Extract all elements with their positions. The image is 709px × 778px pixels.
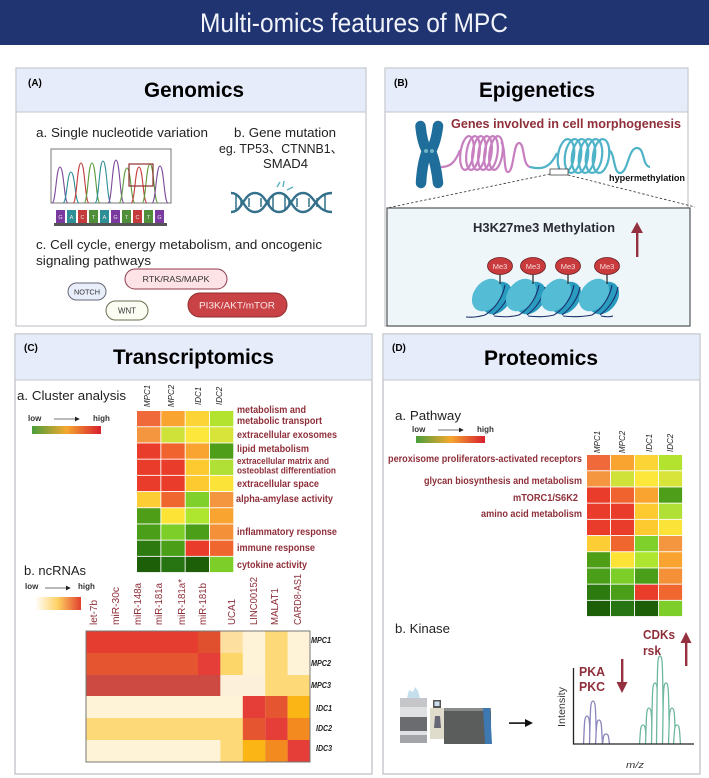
heatmap row labels: inflammatory response bbox=[237, 527, 337, 538]
text: gene mutation: b. Gene mutation bbox=[234, 125, 336, 140]
ncRNA column labels: miR-30c bbox=[110, 587, 122, 625]
text: cluster analysis: a. Cluster analysis bbox=[17, 388, 126, 403]
text: gene mutation: SMAD4 bbox=[263, 156, 308, 171]
text: PKA PKC bbox=[579, 664, 606, 694]
column labels: IDC2 bbox=[215, 386, 224, 405]
heatmap: cluster analysis bbox=[137, 411, 233, 572]
column labels: MPC2 bbox=[167, 384, 176, 407]
panel label A: (A) bbox=[28, 78, 42, 89]
panel: epigenetics bbox=[385, 68, 695, 326]
ncRNA row labels: IDC2 bbox=[316, 724, 332, 733]
genomics header bar bbox=[16, 68, 366, 112]
pill: RTK/RAS/MAPK: RTK/RAS/MAPK bbox=[142, 275, 210, 284]
heading: proteomics: Proteomics bbox=[484, 347, 598, 370]
coil: purple chromatin bbox=[441, 135, 530, 172]
legend: low to high: high bbox=[93, 414, 110, 423]
heatmap row labels: alpha-amylase activity bbox=[236, 494, 333, 505]
chromatogram bbox=[51, 149, 171, 226]
heatmap row labels: extracellular space bbox=[237, 479, 319, 490]
text: pathways: signaling pathways bbox=[36, 253, 151, 268]
pill: RTK/RAS/MAPK bbox=[125, 269, 227, 289]
text: gene mutation: eg. TP53、CTNNB1、 bbox=[219, 141, 343, 156]
heading: epigenetics: Epigenetics bbox=[479, 79, 595, 102]
zoom selection and dashed lines bbox=[387, 169, 695, 208]
legend: ncRNA low to high: low bbox=[25, 582, 39, 591]
legend: ncRNA low to high bbox=[25, 582, 95, 610]
heading: transcriptomics: Transcriptomics bbox=[113, 346, 274, 369]
proteomics header bar bbox=[383, 334, 700, 380]
ncRNA column labels: MALAT1 bbox=[269, 588, 281, 625]
axis label: m/z: m/z bbox=[626, 760, 644, 771]
ncRNA column labels: CARD8-AS1 bbox=[292, 574, 304, 625]
pill: WNT: WNT bbox=[118, 306, 136, 316]
arrow: up bbox=[631, 222, 643, 257]
ncRNA row labels: IDC1 bbox=[316, 704, 332, 713]
ncRNA column labels: miR-181b bbox=[197, 583, 209, 625]
chromatogram: G bbox=[157, 215, 162, 221]
column labels: MPC1 bbox=[143, 385, 152, 407]
legend: pathway low to high: high bbox=[477, 425, 494, 434]
arrow: instrument to spectrum bbox=[509, 719, 533, 727]
legend: pathway low to high bbox=[412, 425, 494, 443]
heatmap row labels: lipid metabolism bbox=[237, 444, 309, 455]
heatmap row labels: metabolic transport bbox=[237, 416, 323, 427]
pill: WNT bbox=[106, 301, 148, 320]
epigenetics header bar bbox=[385, 68, 688, 112]
nucleosomes bbox=[466, 273, 625, 320]
pathway row labels bbox=[388, 454, 582, 520]
text: CDKs rsk bbox=[643, 627, 675, 658]
coil: teal hypermethylated chromatin bbox=[530, 138, 650, 174]
panel label B: (B) bbox=[394, 78, 408, 89]
pathway column labels: IDC1 bbox=[645, 434, 654, 452]
legend: pathway low to high: low bbox=[412, 425, 426, 434]
heatmap row labels: metabolism and bbox=[237, 405, 306, 416]
text: PKA PKC: PKA bbox=[579, 664, 606, 679]
panel: proteomics bbox=[383, 334, 700, 774]
ncRNA column labels: LINC00152 bbox=[248, 577, 260, 625]
purple peaks bbox=[584, 701, 610, 744]
pathway row labels: glycan biosynthesis and metabolism bbox=[424, 476, 582, 487]
heatmap: ncRNAs bbox=[86, 631, 310, 762]
chromatogram: C bbox=[136, 215, 140, 221]
text: gene mutation bbox=[219, 125, 343, 171]
chart: mass spectrum bbox=[557, 656, 694, 771]
icon: mass spectrometer bbox=[400, 687, 492, 744]
text: PKA PKC: PKC bbox=[579, 679, 606, 694]
ncRNA row labels: IDC3 bbox=[316, 744, 332, 753]
ncRNA row labels: MPC1 bbox=[311, 636, 331, 645]
ncRNA row labels: MPC3 bbox=[311, 681, 331, 690]
chromatogram: A bbox=[70, 215, 74, 221]
heading: genomics: Genomics bbox=[144, 79, 244, 102]
heatmap row labels: immune response bbox=[237, 543, 315, 554]
panel label C: (C) bbox=[24, 343, 38, 354]
pill: NOTCH: NOTCH bbox=[74, 288, 100, 296]
text: pathways: c. Cell cycle, energy metabolism, and oncogenic bbox=[36, 237, 322, 252]
transcriptomics header bar bbox=[15, 334, 372, 380]
pill: PI3K/AKT/mTOR bbox=[188, 293, 287, 317]
pathway column labels bbox=[593, 430, 675, 453]
text: CDKs rsk: CDKs bbox=[643, 627, 675, 642]
chromatogram: G bbox=[58, 215, 63, 221]
ncRNA column labels: let-7b bbox=[88, 600, 100, 625]
pathway column labels: MPC1 bbox=[593, 431, 602, 453]
chromatogram: T bbox=[147, 215, 151, 221]
ncRNA row labels: MPC2 bbox=[311, 659, 331, 668]
box: H3K27me3 methylation bbox=[387, 208, 690, 326]
text: genes involved: Genes involved in cell morphogenesis bbox=[451, 116, 681, 131]
methyl marks bbox=[488, 258, 620, 284]
chromatogram: T bbox=[125, 215, 129, 221]
axis label: intensity: Intensity bbox=[557, 687, 568, 727]
methyl marks: Me3 bbox=[493, 262, 507, 271]
title banner: Multi-omics features of MPC bbox=[200, 8, 508, 38]
pathway row labels: mTORC1/S6K2 bbox=[513, 493, 578, 504]
heatmap: pathway bbox=[587, 455, 682, 616]
text: ncRNAs: b. ncRNAs bbox=[24, 563, 86, 578]
panel label D: (D) bbox=[392, 343, 406, 354]
ncRNA column labels: miR-148a bbox=[132, 583, 144, 625]
ncRNA column labels: miR-181a* bbox=[176, 579, 188, 625]
title banner bbox=[0, 0, 709, 45]
pathway row labels: peroxisome proliferators-activated receptors bbox=[388, 454, 582, 465]
methyl marks: Me3 bbox=[600, 262, 614, 271]
icon: DNA helix bbox=[231, 181, 332, 212]
chromatogram: G bbox=[113, 215, 118, 221]
text: hypermethylation: hypermethylation bbox=[609, 173, 685, 184]
pathway column labels: MPC2 bbox=[618, 430, 627, 453]
column labels: IDC1 bbox=[194, 387, 203, 405]
arrow: down bbox=[616, 659, 628, 693]
heatmap row labels: osteoblast differentiation bbox=[237, 466, 336, 476]
ncRNA row labels bbox=[311, 636, 332, 753]
arrow: up bbox=[680, 632, 692, 666]
chromatogram: C bbox=[81, 215, 85, 221]
ncRNA column labels: UCA1 bbox=[226, 599, 238, 625]
panel: transcriptomics bbox=[15, 334, 372, 774]
heatmap row labels: extracellular exosomes bbox=[237, 430, 337, 441]
chromatogram: T bbox=[92, 215, 96, 221]
text: single nucleotide variation: a. Single nucleotide variation bbox=[36, 125, 208, 140]
legend: low to high bbox=[28, 414, 110, 434]
pill: PI3K/AKT/mTOR: PI3K/AKT/mTOR bbox=[199, 300, 276, 310]
text: CDKs rsk: rsk bbox=[643, 643, 662, 658]
text: kinase: b. Kinase bbox=[395, 621, 450, 636]
methyl marks: Me3 bbox=[561, 262, 575, 271]
methyl marks: Me3 bbox=[526, 262, 540, 271]
icon: chromosome bbox=[420, 126, 438, 183]
pathway column labels: IDC2 bbox=[666, 433, 675, 452]
text: pathways bbox=[36, 237, 322, 268]
legend: ncRNA low to high: high bbox=[78, 582, 95, 591]
chromatogram: A bbox=[103, 215, 107, 221]
pathway row labels: amino acid metabolism bbox=[481, 509, 582, 520]
text: H3K27me3: H3K27me3 Methylation bbox=[473, 221, 615, 235]
spectrum axes bbox=[574, 668, 694, 744]
heatmap row labels: extracellular matrix and bbox=[237, 456, 329, 466]
ncRNA column labels: miR-181a bbox=[153, 583, 165, 625]
text: pathway: a. Pathway bbox=[395, 408, 461, 423]
heatmap row labels bbox=[236, 405, 337, 571]
green peaks bbox=[640, 656, 680, 744]
heatmap row labels: cytokine activity bbox=[237, 560, 307, 571]
legend: low to high: low bbox=[28, 414, 42, 423]
ncRNA column labels bbox=[88, 574, 304, 625]
panel: genomics bbox=[16, 68, 366, 326]
column labels bbox=[143, 384, 224, 407]
pill: NOTCH bbox=[68, 283, 106, 300]
